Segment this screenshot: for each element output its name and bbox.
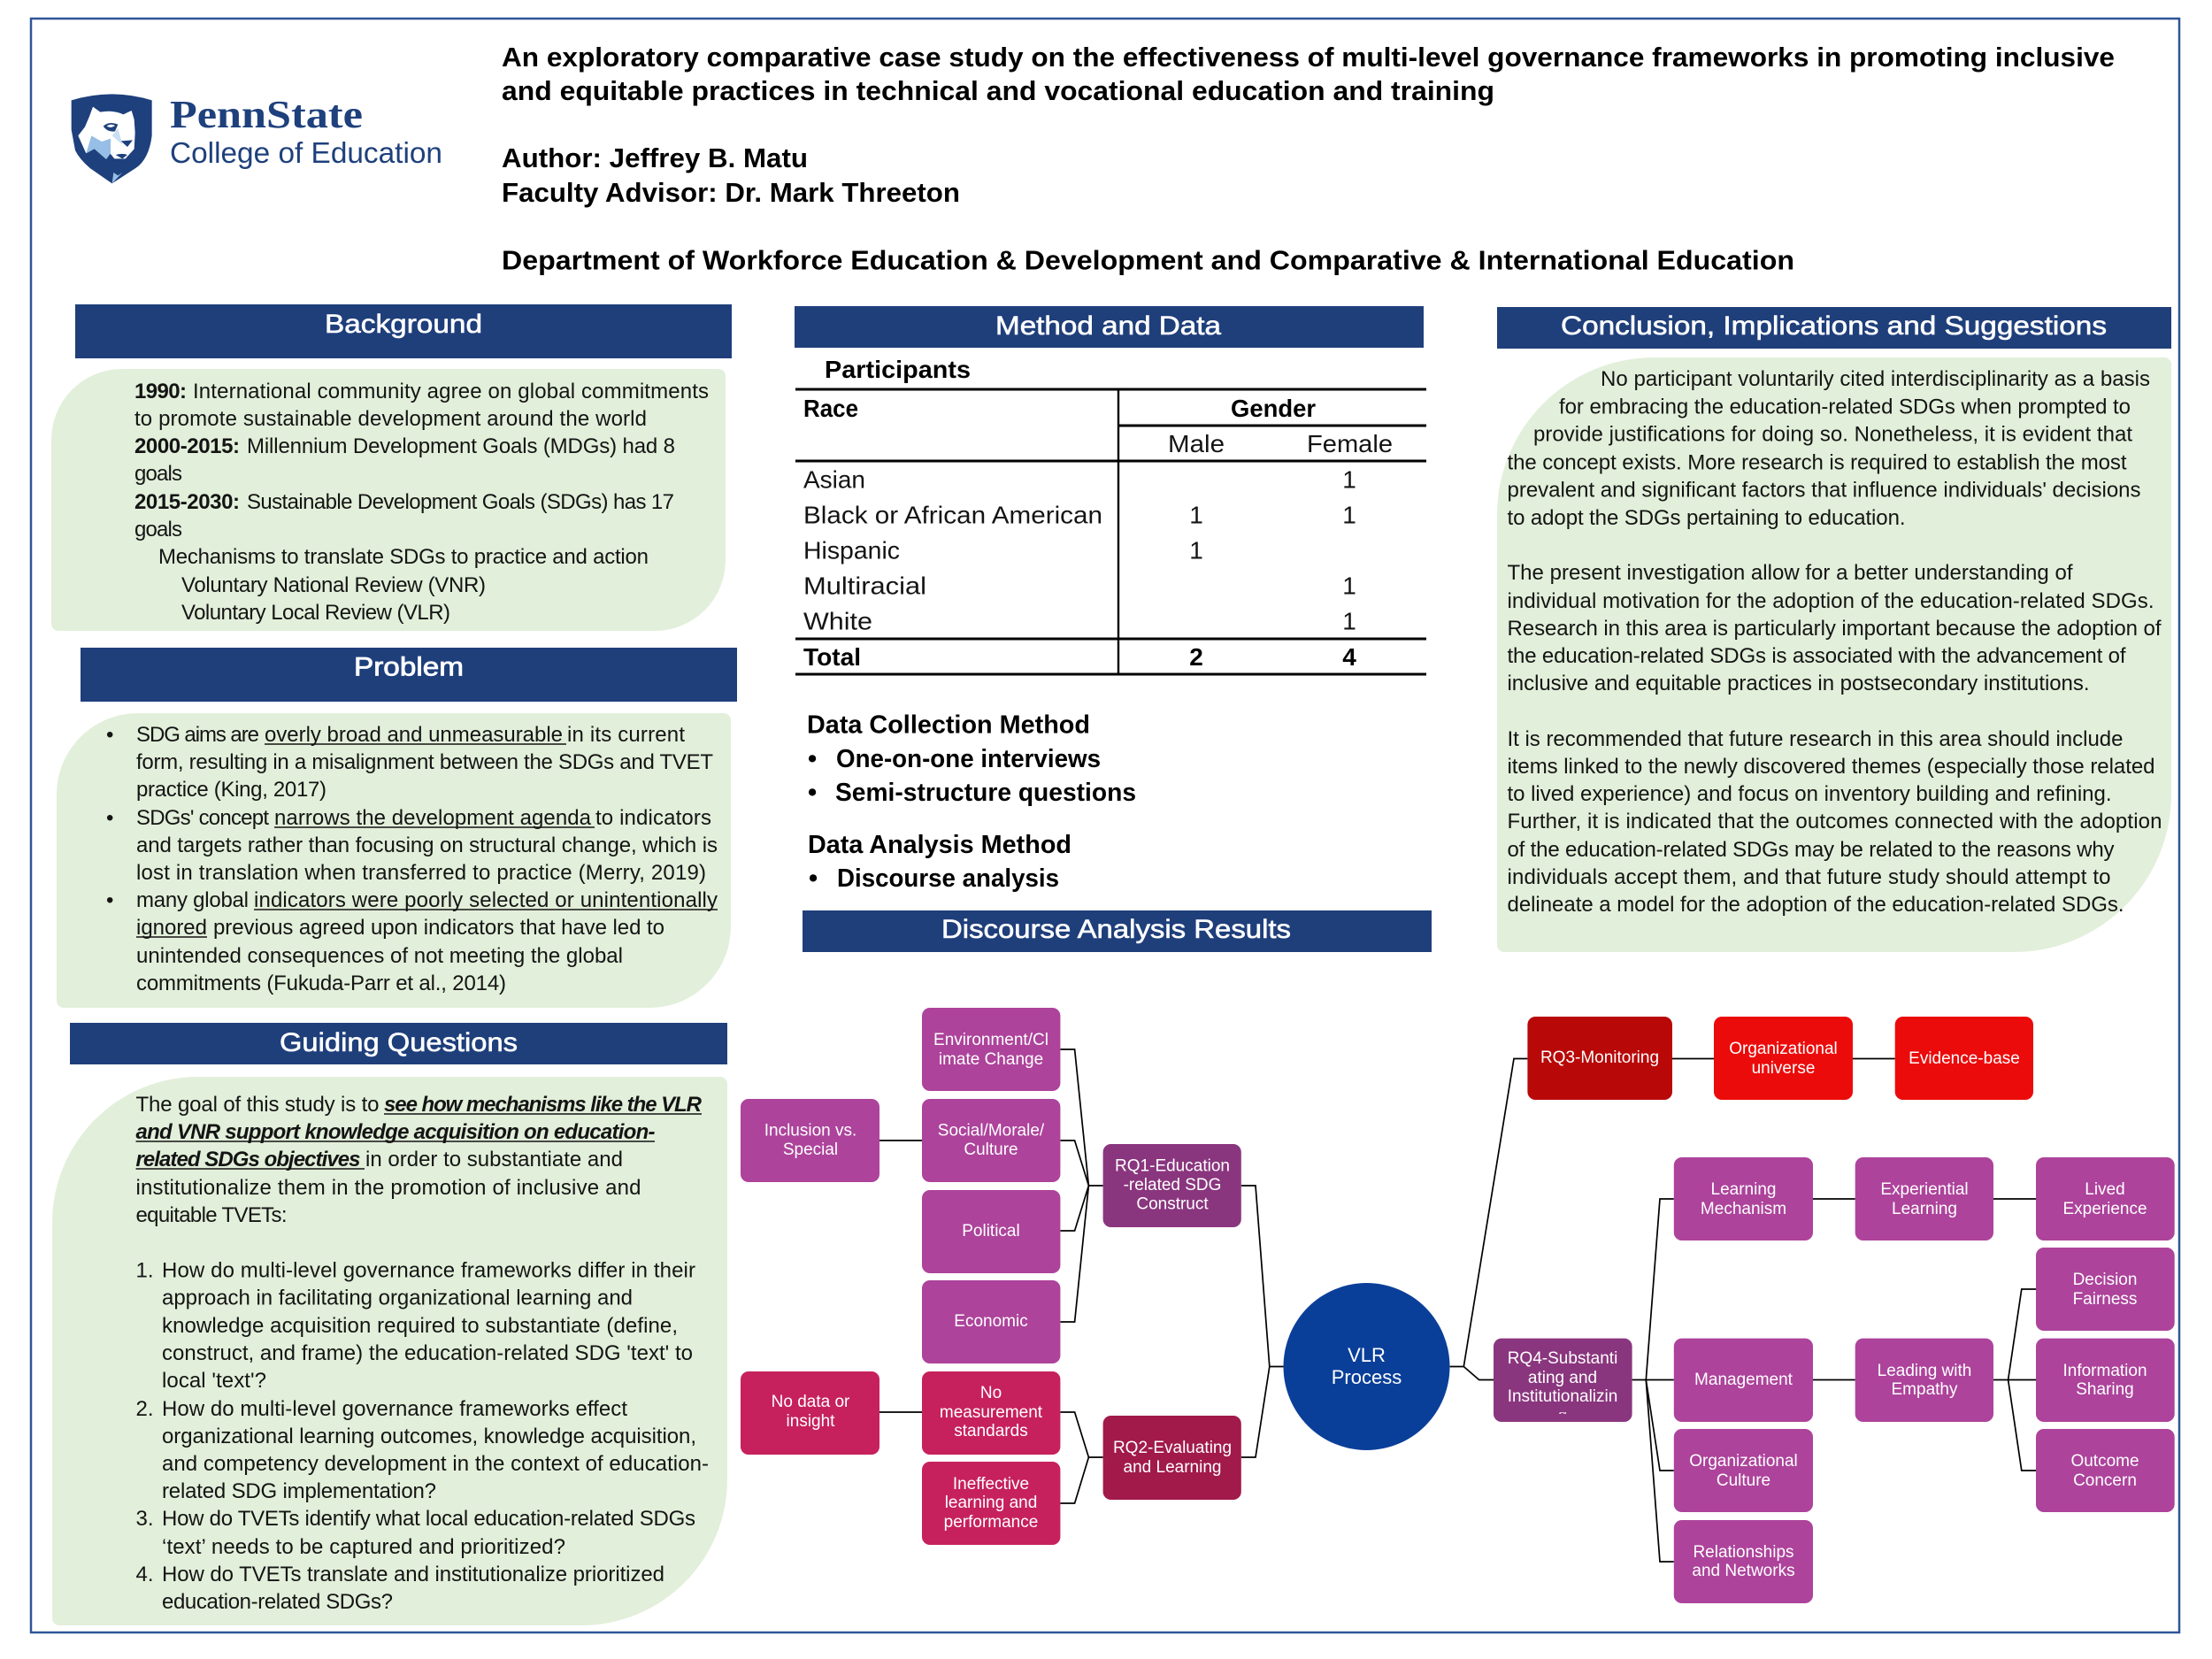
node: Lived Experience: Lived	[2085, 1180, 2125, 1199]
node: Organizational Culture: Organizational	[1689, 1452, 1798, 1471]
panel: problem text: commitments (Fukuda-Parr et al., 2014)	[136, 972, 506, 995]
node: Leading with Empathy	[1855, 1339, 1993, 1422]
panel: problem text: overly broad and unmeasurable	[265, 723, 563, 747]
node: RQ3-Monitoring: RQ3-Monitoring	[1540, 1048, 1659, 1067]
node: No measurement standards: standards	[954, 1422, 1028, 1440]
panel: conclusion text: delineate a model for the adoption of the education-related SDGs.	[1508, 893, 2124, 917]
node: Decision Fairness: Fairness	[2073, 1290, 2137, 1309]
panel: guiding questions text: 2.	[136, 1397, 154, 1421]
text block: data collection method: Data Collection Method	[807, 711, 1090, 740]
panel: conclusion text: of the education-related SDGs may be related to the reasons why	[1508, 838, 2115, 862]
panel: conclusion text	[1497, 357, 2171, 952]
heading: Guiding Questions: Guiding Questions	[280, 1028, 518, 1057]
panel: problem text: indicators were poorly selected or unintentionally	[254, 888, 718, 912]
table: participants by race and gender: White	[803, 607, 872, 635]
node: RQ1: RQ1-Education	[1115, 1157, 1230, 1175]
node: RQ1	[1103, 1144, 1241, 1227]
logo: Penn State College of Education	[72, 93, 442, 183]
text block: data analysis method: •	[809, 864, 818, 893]
panel: guiding questions text: How do multi-level governance frameworks effect	[162, 1397, 627, 1421]
heading: Guiding Questions	[70, 1023, 727, 1064]
node: RQ4: RQ4-Substanti	[1508, 1349, 1617, 1368]
panel: background text	[51, 369, 726, 631]
panel: conclusion text: the concept exists. More research is required to establish the most	[1508, 451, 2127, 474]
table: participants by race and gender: Asian	[803, 465, 865, 494]
panel: background text: Millennium Development Goals (MDGs) had 8	[247, 434, 675, 458]
panel: problem text	[57, 713, 731, 1008]
panel: guiding questions text: related SDGs objectives	[136, 1148, 361, 1171]
text block: data analysis method: Discourse analysis	[837, 864, 1059, 893]
node: No measurement standards: No	[980, 1384, 1002, 1402]
node: Experiential Learning	[1855, 1157, 1993, 1240]
node: Political: Political	[962, 1222, 1020, 1240]
heading: Discourse Analysis Results: Discourse Analysis Results	[941, 915, 1291, 944]
node: Relationships and Networks: and Networks	[1692, 1562, 1795, 1580]
table: participants by race and gender: Multiracial	[803, 572, 926, 600]
panel: guiding questions text: education-related SDGs?	[162, 1590, 393, 1614]
panel: problem text: form, resulting in a misalignment between the SDGs and TVET	[136, 750, 713, 774]
title block: An exploratory comparative case study on the effectiveness of multi-level governance frameworks in promoting inclusive	[502, 42, 2115, 73]
panel: conclusion text: Research in this area is particularly important because the adoption of	[1508, 617, 2162, 641]
text block: data collection method: One-on-one interviews	[836, 745, 1101, 773]
node: RQ3-Monitoring	[1527, 1017, 1672, 1100]
panel: background text: 1990:	[134, 380, 187, 403]
table: participants by race and gender: Female	[1307, 430, 1393, 457]
node: Political	[922, 1190, 1060, 1273]
panel: problem text: in its current	[567, 723, 685, 747]
node: Information Sharing: Information	[2062, 1362, 2147, 1380]
table: participants by race and gender: Gender	[1231, 395, 1316, 422]
table: participants by race and gender: Black or African American	[803, 501, 1102, 529]
panel: conclusion text: the education-related SDGs is associated with the advancement of	[1508, 644, 2126, 668]
node: No measurement standards: measurement	[940, 1403, 1043, 1422]
node: Inclusion vs. Special: Inclusion vs.	[764, 1122, 856, 1140]
node: Leading with Empathy: Empathy	[1892, 1380, 1958, 1399]
node: No measurement standards	[922, 1371, 1060, 1455]
panel: conclusion text: individuals accept them, and that future study should attempt to	[1508, 865, 2111, 889]
panel: background text: Voluntary National Review (VNR)	[181, 573, 486, 597]
text block: data collection method: •	[808, 779, 817, 807]
panel: problem text: ignored	[136, 916, 207, 940]
panel: background text: Mechanisms to translate SDGs to practice and action	[158, 545, 649, 569]
node: Decision Fairness: Decision	[2073, 1271, 2137, 1289]
panel: guiding questions text: How do TVETs identify what local education-related SDGs	[162, 1507, 695, 1531]
heading: Participants: Participants	[825, 356, 971, 383]
title block: Faculty Advisor: Dr. Mark Threeton	[502, 177, 960, 208]
table: participants by race and gender: 1	[1342, 572, 1356, 600]
panel: background text: International community agree on global commitments	[193, 380, 709, 403]
table: participants by race and gender: 1	[1342, 607, 1356, 635]
node: Inclusion vs. Special: Special	[783, 1141, 838, 1159]
node: Relationships and Networks	[1674, 1520, 1813, 1603]
table: participants by race and gender: Total	[803, 643, 861, 671]
node: Organizational Culture	[1674, 1429, 1813, 1512]
panel: guiding questions text: related SDG implementation?	[162, 1479, 436, 1503]
table: participants by race and gender: 1	[1189, 501, 1203, 529]
node: Ineffective learning and performance: performance	[944, 1513, 1038, 1532]
node: Decision Fairness	[2036, 1248, 2175, 1331]
node: Evidence-base	[1895, 1017, 2033, 1100]
panel: conclusion text: to adopt the SDGs pertaining to education.	[1508, 506, 1906, 530]
table: participants by race and gender: Hispanic	[803, 536, 900, 565]
panel: guiding questions text: 4.	[136, 1563, 154, 1586]
panel: problem text: and targets rather than focusing on structural change, which is	[136, 833, 718, 857]
node: Social/Morale/Culture	[922, 1099, 1060, 1182]
panel: problem text: previous agreed upon indicators that have led to	[213, 916, 664, 940]
diagram: discourse analysis results tree	[741, 1008, 2175, 1603]
panel: problem text: •	[106, 888, 113, 912]
node: Learning Mechanism: Mechanism	[1701, 1200, 1786, 1218]
logo wordmark: College of Education: College of Education	[170, 136, 442, 169]
node: Ineffective learning and performance: Ineffective	[953, 1475, 1029, 1494]
panel: background text: goals	[134, 462, 182, 486]
node: Leading with Empathy: Leading with	[1878, 1362, 1971, 1380]
panel: guiding questions text: equitable TVETs:	[136, 1203, 287, 1227]
node: RQ2: RQ2-Evaluating	[1113, 1439, 1232, 1457]
panel: guiding questions text: local 'text'?	[162, 1369, 266, 1393]
node: Information Sharing: Sharing	[2076, 1380, 2134, 1399]
panel: conclusion text: No participant voluntarily cited interdisciplinarity as a basis	[1601, 367, 2150, 391]
logo wordmark: PennState: PennState	[170, 93, 363, 136]
panel: problem text: many global	[136, 888, 249, 912]
text block: data collection method: Semi-structure questions	[835, 779, 1136, 807]
table: participants by race and gender: Male	[1168, 430, 1225, 457]
title block: Author: Jeffrey B. Matu	[502, 142, 808, 173]
panel: guiding questions text: How do multi-level governance frameworks differ in their	[162, 1258, 695, 1283]
heading: Problem	[81, 648, 737, 702]
panel: conclusion text: Further, it is indicated that the outcomes connected with the adoption	[1508, 810, 2162, 833]
node: Experiential Learning: Learning	[1892, 1200, 1957, 1218]
title block: and equitable practices in technical and vocational education and training	[502, 75, 1494, 106]
panel: guiding questions text: ‘text’ needs to be captured and prioritized?	[162, 1535, 565, 1559]
panel: guiding questions text: 1.	[136, 1258, 154, 1283]
connectors: right branches	[1450, 1058, 2036, 1562]
node: Economic: Economic	[954, 1312, 1028, 1331]
panel: guiding questions text: How do TVETs translate and institutionalize prioritized	[162, 1563, 664, 1586]
node: Ineffective learning and performance: learning and	[945, 1494, 1037, 1512]
panel: conclusion text: provide justifications for doing so. Nonetheless, it is evident that	[1533, 423, 2132, 446]
panel: guiding questions text: knowledge acquisition required to substantiate (define,	[162, 1314, 678, 1338]
panel: background text: 2000-2015:	[134, 434, 240, 458]
node: Organizational Culture: Culture	[1717, 1471, 1770, 1490]
node: RQ1: Construct	[1136, 1194, 1209, 1214]
node: RQ4: g	[1558, 1407, 1567, 1425]
panel: conclusion text: prevalent and significant factors that influence individuals' decisions	[1508, 478, 2141, 503]
heading: Background: Background	[325, 310, 482, 339]
node: RQ4: ating and	[1528, 1369, 1597, 1387]
panel: conclusion text: The present investigation allow for a better understanding of	[1508, 561, 2073, 585]
node: Environment/Climate Change	[922, 1008, 1060, 1091]
table: participants by race and gender: 1	[1189, 536, 1203, 565]
panel: guiding questions text: see how mechanisms like the VLR	[384, 1093, 703, 1117]
node: Organizational universe: universe	[1752, 1059, 1815, 1078]
node: Lived Experience: Experience	[2062, 1200, 2147, 1218]
heading: Conclusion, Implications and Suggestions: Conclusion, Implications and Suggestions	[1561, 311, 2107, 341]
panel: guiding questions text	[52, 1077, 727, 1625]
node: Management: Management	[1694, 1371, 1793, 1389]
heading: Problem: Problem	[354, 653, 464, 681]
table: participants by race and gender: 1	[1342, 465, 1356, 494]
node: VLR Process circle: VLR	[1348, 1344, 1386, 1366]
text block: data collection method: •	[808, 745, 817, 773]
heading: Discourse Analysis Results	[803, 910, 1432, 952]
text block: data collection method	[807, 711, 1136, 807]
table: participants by race and gender: Race	[803, 395, 858, 422]
panel: problem text: practice (King, 2017)	[136, 778, 326, 802]
panel: conclusion text: individual motivation for the adoption of the education-related SDGs.	[1508, 589, 2154, 613]
panel: guiding questions text: institutionalize them in the promotion of inclusive and	[136, 1176, 641, 1200]
node: Management	[1674, 1339, 1813, 1422]
heading: Conclusion, Implications and Suggestions	[1497, 307, 2171, 349]
panel: problem text: •	[106, 806, 113, 830]
node: No data or insight: insight	[787, 1412, 835, 1431]
node: Social/Morale/Culture: Social/Morale/	[938, 1122, 1045, 1140]
panel: conclusion text: It is recommended that future research in this area should include	[1508, 727, 2124, 751]
panel: guiding questions text: and VNR support knowledge acquisition on education-	[136, 1120, 655, 1144]
node: Outcome Concern: Concern	[2073, 1471, 2137, 1490]
title block	[502, 42, 2115, 276]
node: No data or insight: No data or	[772, 1393, 850, 1411]
panel: background text: goals	[134, 518, 182, 541]
icon: Nittany lion shield	[72, 94, 152, 183]
node: Information Sharing	[2036, 1339, 2175, 1422]
panel: problem text: to indicators	[595, 806, 711, 830]
panel: conclusion text: items linked to the newly discovered themes (especially those related	[1508, 755, 2155, 779]
node: No data or insight	[741, 1371, 879, 1455]
table: participants by race and gender: 2	[1189, 643, 1203, 671]
panel: guiding questions text: 3.	[136, 1507, 154, 1531]
panel: problem text: •	[106, 723, 113, 747]
node: Learning Mechanism	[1674, 1157, 1813, 1240]
panel: background text: Sustainable Development Goals (SDGs) has 17	[247, 490, 674, 514]
node: Environment/Climate Change: Environment/Cl	[933, 1031, 1048, 1049]
node: Social/Morale/Culture: Culture	[964, 1141, 1018, 1159]
panel: conclusion text: to lived experience) and focus on inventory building and refining.	[1508, 782, 2111, 806]
title block: Department of Workforce Education & Development and Comparative & International Education	[502, 244, 1794, 276]
node: VLR Process circle	[1283, 1283, 1449, 1450]
panel: guiding questions text: in order to substantiate and	[365, 1148, 623, 1171]
panel: problem text: narrows the development agenda	[274, 806, 592, 830]
panel: background text: to promote sustainable development around the world	[134, 407, 647, 431]
node: Experiential Learning: Experiential	[1880, 1180, 1969, 1199]
panel: guiding questions text: approach in facilitating organizational learning and	[162, 1286, 633, 1310]
node: RQ4: Institutionalizin	[1508, 1387, 1617, 1406]
panel: conclusion text: for embracing the education-related SDGs when prompted to	[1559, 395, 2131, 419]
node: RQ4	[1494, 1339, 1632, 1425]
panel: background text: Voluntary Local Review (VLR)	[181, 601, 450, 625]
node: Outcome Concern: Outcome	[2070, 1452, 2139, 1471]
node: RQ2	[1103, 1416, 1241, 1500]
node: Outcome Concern	[2036, 1429, 2175, 1512]
text block: data analysis method: Data Analysis Method	[808, 831, 1071, 859]
node: Relationships and Networks: Relationships	[1693, 1543, 1794, 1562]
connectors: left branches	[879, 1049, 1283, 1503]
heading: Background	[75, 304, 732, 358]
node: Evidence-base: Evidence-base	[1909, 1049, 2020, 1068]
node: Inclusion vs. Special	[741, 1099, 879, 1182]
text block: data analysis method	[808, 831, 1071, 893]
node: Organizational universe	[1714, 1017, 1853, 1100]
node: VLR Process circle: Process	[1332, 1366, 1402, 1388]
heading: Method and Data	[795, 306, 1424, 348]
node: RQ1: -related SDG	[1124, 1176, 1221, 1194]
panel: problem text: unintended consequences of not meeting the global	[136, 944, 623, 968]
table: participants by race and gender: 4	[1342, 643, 1356, 671]
panel: guiding questions text: organizational learning outcomes, knowledge acquisition,	[162, 1425, 696, 1448]
panel: problem text: SDG aims are	[136, 723, 259, 747]
node: Organizational universe: Organizational	[1729, 1040, 1838, 1058]
panel: guiding questions text: The goal of this study is to	[136, 1093, 379, 1117]
node: RQ2: and Learning	[1124, 1458, 1221, 1477]
table: participants by race and gender	[795, 389, 1426, 674]
panel: conclusion text: inclusive and equitable practices in postsecondary institutions.	[1508, 672, 2090, 695]
panel: guiding questions text: construct, and frame) the education-related SDG 'text' to	[162, 1341, 693, 1365]
table: participants by race and gender: 1	[1342, 501, 1356, 529]
panel: problem text: lost in translation when transferred to practice (Merry, 2019)	[136, 861, 706, 885]
panel: guiding questions text: and competency development in the context of education-	[162, 1452, 709, 1476]
node: Lived Experience	[2036, 1157, 2175, 1240]
heading: Method and Data: Method and Data	[995, 311, 1221, 341]
node: Learning Mechanism: Learning	[1711, 1180, 1776, 1199]
panel: background text: 2015-2030:	[134, 490, 240, 514]
node: Economic	[922, 1280, 1060, 1363]
panel: problem text: SDGs' concept	[136, 806, 269, 830]
node: Environment/Climate Change: imate Change	[939, 1050, 1043, 1069]
node: Ineffective learning and performance	[922, 1462, 1060, 1545]
